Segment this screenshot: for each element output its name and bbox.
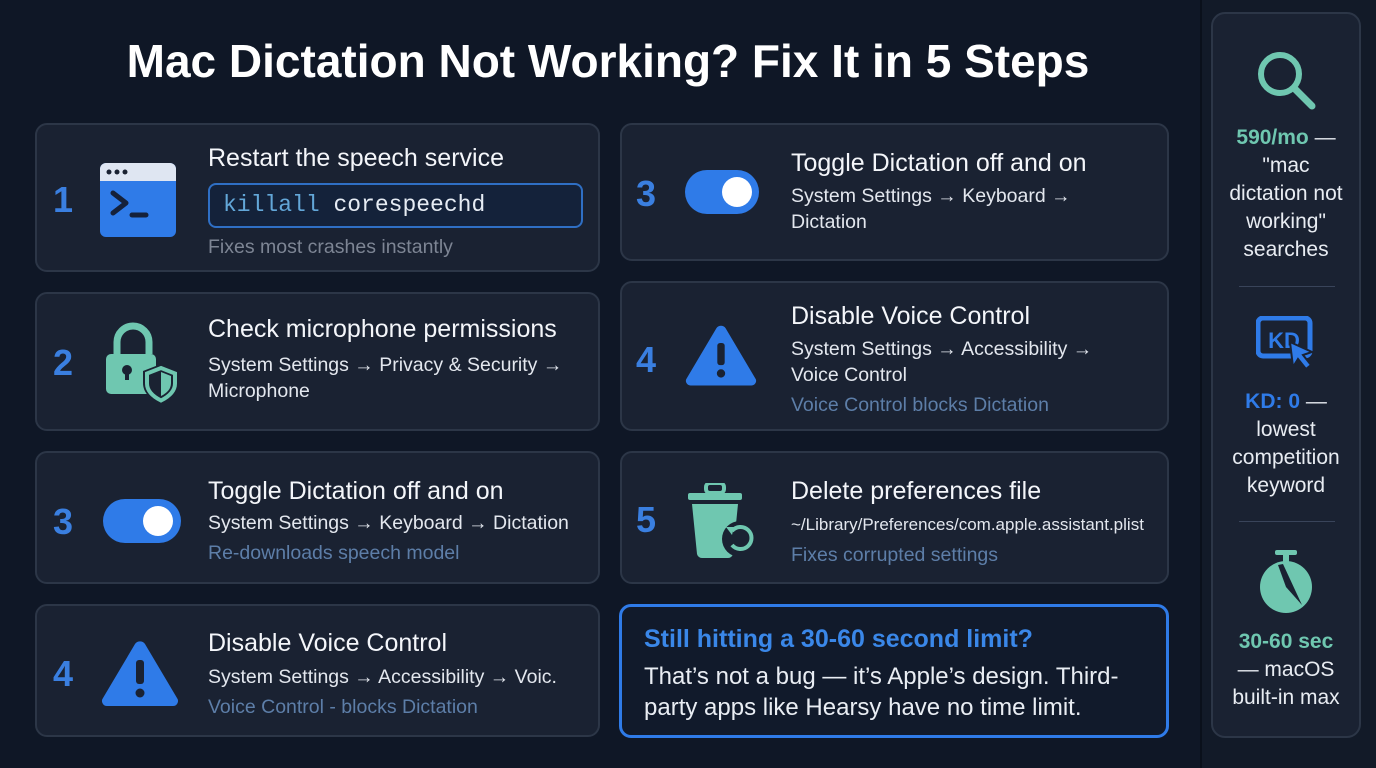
stat: searches: working" (1246, 210, 1326, 233)
step 5 text: Fixes corrupted settings (791, 544, 998, 566)
icon: terminal (100, 163, 176, 237)
icon: warning triangle (686, 326, 756, 386)
step 4 right text: Disable Voice Control (791, 302, 1030, 330)
number 2: 2 (53, 342, 73, 383)
step 4 text: Disable Voice Control (208, 629, 447, 657)
title: Mac Dictation Not Working? Fix It in 5 Steps (127, 35, 1089, 87)
step 3 text: Toggle Dictation off and on (208, 477, 504, 505)
icon: magnifier (1258, 52, 1316, 110)
icon: toggle switch (685, 170, 759, 214)
panel: step 3 toggle dictation (left) (35, 451, 600, 584)
icon: stopwatch (1260, 550, 1312, 613)
stat: time limit: built-in max (1232, 686, 1340, 709)
callout: 30-60 second limit: That’s not a bug — it’s Apple’s design. Third-party apps like Hearsy have no time limit. (644, 663, 1119, 721)
step 3 text: System Settings → Keyboard → Dictation (208, 512, 569, 534)
stat: KD: competition (1232, 446, 1340, 469)
icon: warning triangle (102, 641, 178, 706)
icon: toggle switch (103, 499, 181, 543)
code box (208, 183, 583, 228)
stat: time limit: — macOS (1238, 658, 1334, 681)
step 2 text: System Settings → Privacy & Security → Microphone (208, 354, 562, 402)
step 5 text (791, 477, 1144, 566)
callout: 30-60 second limit (619, 604, 1169, 738)
panel: step 1 restart speech service (35, 123, 600, 272)
icon: lock with shield (106, 322, 177, 403)
step 2 text (208, 315, 562, 402)
panel: step 5 delete preferences (620, 451, 1169, 584)
step 3 text: Re-downloads speech model (208, 542, 459, 564)
stat: searches: "mac (1262, 154, 1310, 177)
stat: searches: dictation not (1229, 182, 1343, 205)
number 1: 1 (53, 179, 73, 220)
stat: searches: searches (1243, 238, 1329, 261)
step 4 text: System Settings → Accessibility → Voic. (208, 666, 557, 688)
number 5: 5 (636, 499, 656, 540)
step 2 text: Check microphone permissions (208, 315, 557, 343)
stat: searches: 590/mo — (1236, 126, 1336, 149)
step 3 text (208, 477, 569, 564)
step 1 text (208, 144, 583, 258)
step 3 right text: System Settings → Keyboard → Dictation (791, 185, 1071, 233)
step 4 text (208, 629, 557, 718)
icon: KD cursor: KD (1268, 328, 1300, 353)
step 1 text: Restart the speech service (208, 144, 504, 172)
number 3: 3 (636, 173, 656, 214)
step 5 text: Delete preferences file (791, 477, 1041, 505)
number 4: 4 (636, 339, 656, 380)
callout: 30-60 second limit: Still hitting a 30-60 second limit? (644, 625, 1033, 653)
sidebar background strip (1200, 0, 1376, 768)
panel: step 4 disable voice control (left) (35, 604, 600, 737)
icon: KD cursor (1256, 316, 1312, 368)
code box: killall corespeechd (223, 192, 485, 218)
step 4 text: Voice Control - blocks Dictation (208, 696, 478, 718)
step 1 text: Fixes most crashes instantly (208, 236, 453, 258)
step 5 text: ~/Library/Preferences/com.apple.assistant.plist (791, 515, 1144, 534)
step 4 right text: Voice Control blocks Dictation (791, 394, 1049, 416)
step 3 right text: Toggle Dictation off and on (791, 149, 1087, 177)
panel: step 2 microphone permissions (35, 292, 600, 431)
stat: time limit: 30-60 sec (1239, 630, 1333, 653)
step 3 right text (791, 149, 1087, 233)
number 3: 3 (53, 501, 73, 542)
number 4: 4 (53, 653, 73, 694)
panel: step 4 disable voice control (right) (620, 281, 1169, 431)
stat: searches (1229, 52, 1343, 261)
panel: step 3 toggle dictation (right) (620, 123, 1169, 261)
stat: time limit (1232, 550, 1340, 709)
stat: KD: lowest (1256, 418, 1316, 441)
panel: sidebar stats (1211, 12, 1361, 738)
step 4 right text (791, 302, 1092, 416)
stat: KD: KD: 0 — (1245, 390, 1327, 413)
stat: KD: keyword (1247, 474, 1325, 497)
stat: KD (1232, 316, 1340, 497)
step 4 right text: System Settings → Accessibility → Voice Control (791, 338, 1092, 386)
icon: trash with restore arrow (688, 483, 754, 558)
